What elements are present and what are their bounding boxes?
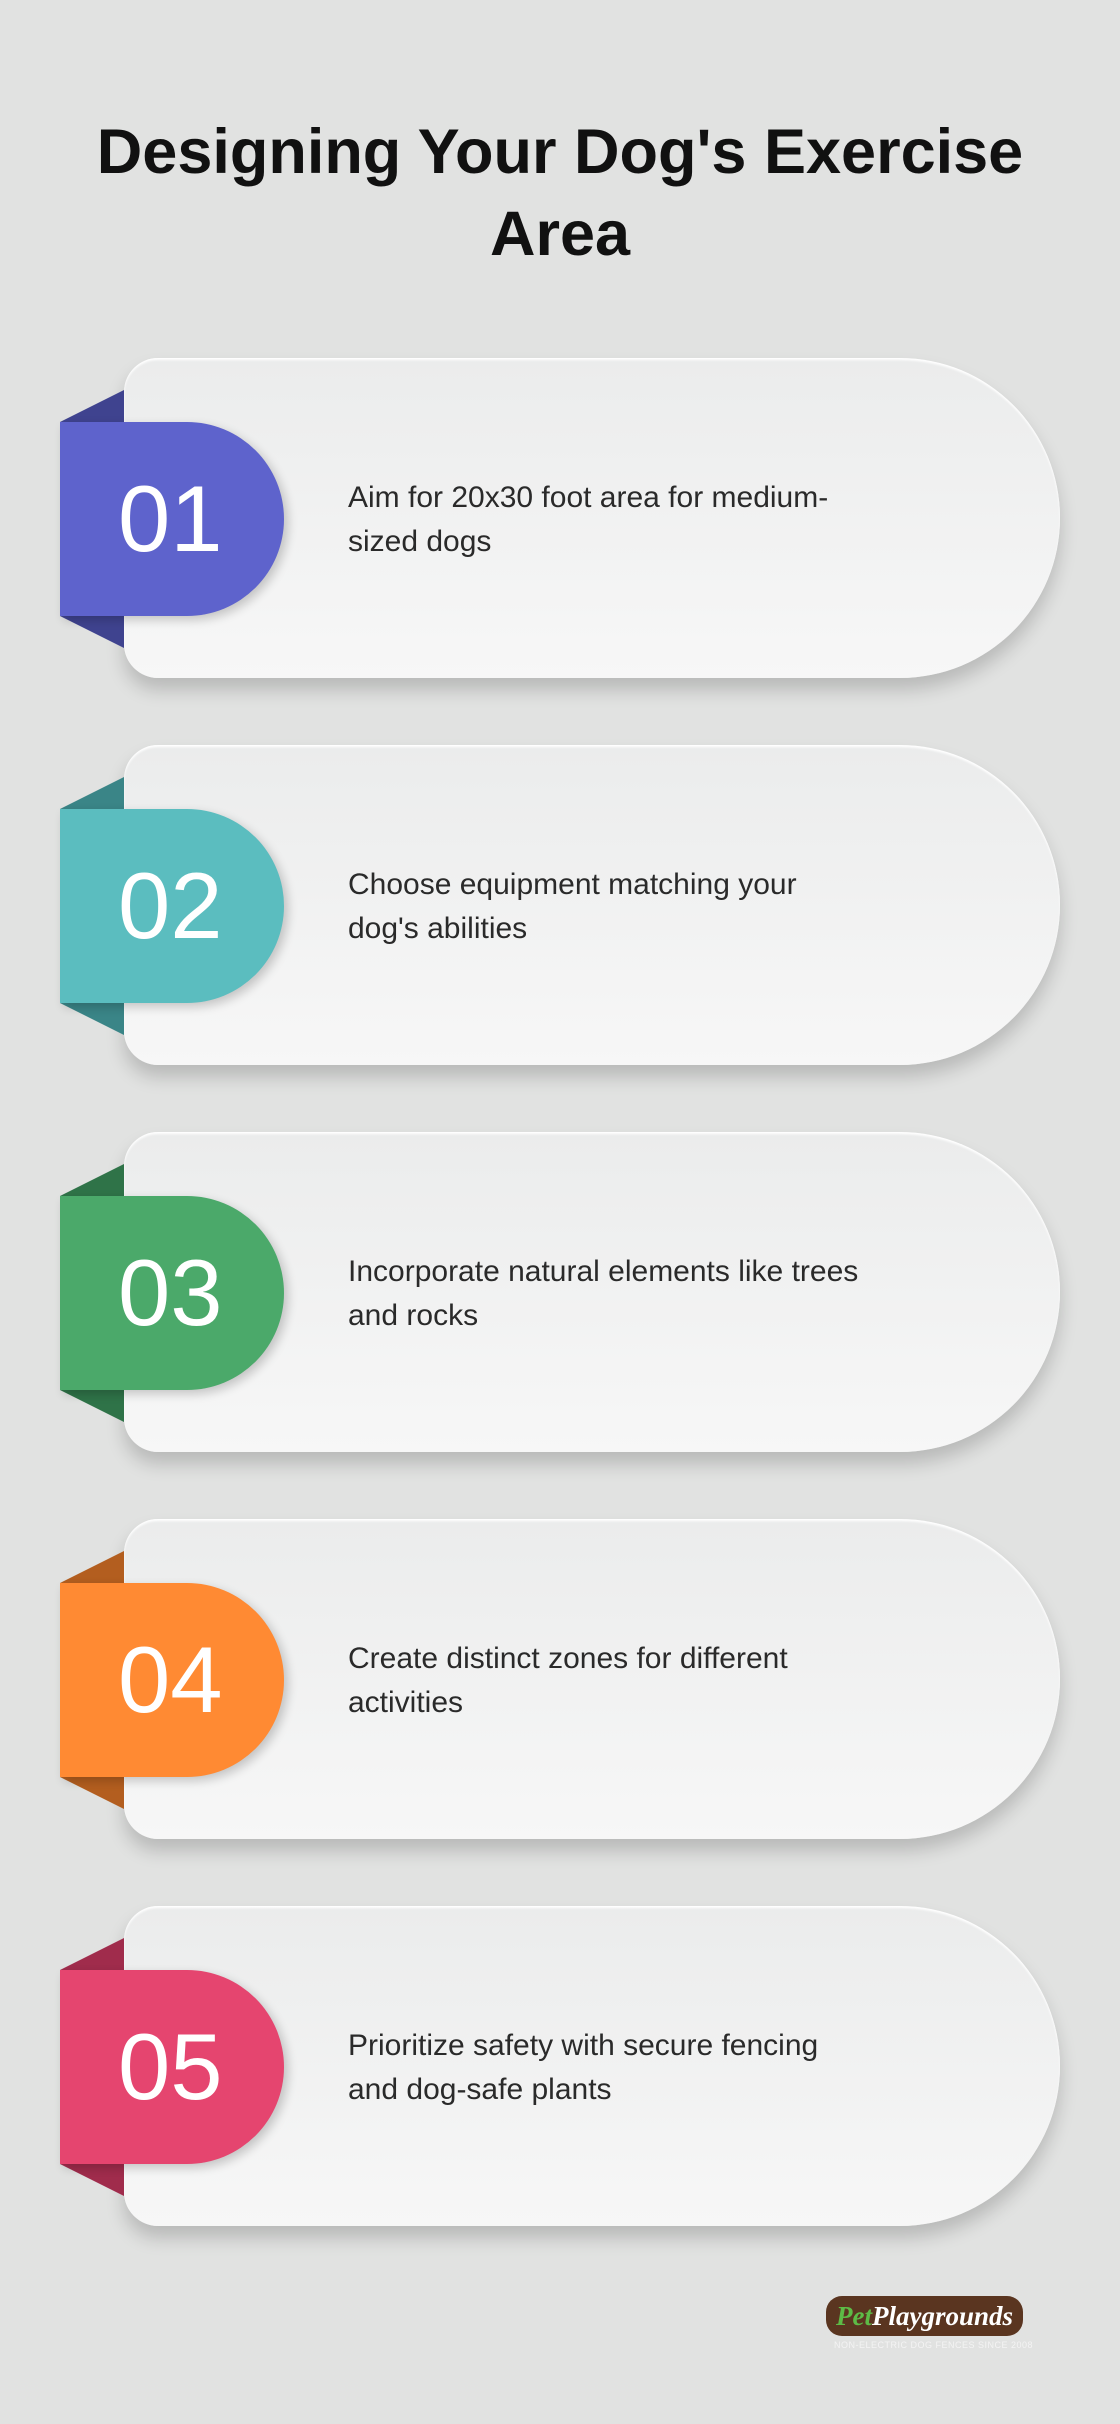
text 03: Incorporate natural elements like trees	[348, 1255, 858, 1288]
card 03	[124, 1132, 1060, 1452]
title: Designing Your Dog's Exercise	[97, 117, 1023, 187]
logo wordmark	[826, 2296, 1023, 2336]
card 05	[124, 1906, 1060, 2226]
badge 05	[60, 1970, 284, 2164]
text 02: dog's abilities	[348, 912, 527, 945]
badge 04	[60, 1583, 284, 1777]
text 05: and dog-safe plants	[348, 2073, 612, 2106]
panel: step 02	[60, 745, 1067, 1084]
badge 01	[60, 422, 284, 616]
text 05: Prioritize safety with secure fencing	[348, 2029, 818, 2062]
title	[97, 117, 1023, 269]
text 05	[348, 2029, 818, 2106]
panel: step 03	[60, 1132, 1067, 1471]
text 04: activities	[348, 1686, 463, 1719]
flap 02	[60, 777, 124, 1035]
text 02: Choose equipment matching your	[348, 868, 797, 901]
text 02	[348, 868, 797, 945]
title: Area	[490, 199, 630, 269]
flap 03	[60, 1164, 124, 1422]
badge 05: 05	[118, 2014, 223, 2119]
badge 02	[60, 809, 284, 1003]
logo wordmark: PetPlaygrounds	[836, 2301, 1013, 2331]
panel: step 05	[60, 1906, 1067, 2245]
text 04: Create distinct zones for different	[348, 1642, 788, 1675]
flap 05	[60, 1938, 124, 2196]
card 02	[124, 745, 1060, 1065]
logo tagline: NON-ELECTRIC DOG FENCES SINCE 2008	[834, 2340, 1033, 2350]
flap 01	[60, 390, 124, 648]
card 01	[124, 358, 1060, 678]
text 04	[348, 1642, 788, 1719]
flap 04	[60, 1551, 124, 1809]
badge 03	[60, 1196, 284, 1390]
panel: step 01	[60, 358, 1067, 697]
badge 02: 02	[118, 853, 223, 958]
panel: step 04	[60, 1519, 1067, 1858]
card 04	[124, 1519, 1060, 1839]
badge 01: 01	[118, 466, 223, 571]
text 01: Aim for 20x30 foot area for medium-	[348, 481, 828, 514]
text 03	[348, 1255, 858, 1332]
logo	[826, 2296, 1033, 2350]
text 01	[348, 481, 828, 558]
badge 04: 04	[118, 1627, 223, 1732]
text 03: and rocks	[348, 1299, 478, 1332]
badge 03: 03	[118, 1240, 223, 1345]
text 01: sized dogs	[348, 525, 491, 558]
